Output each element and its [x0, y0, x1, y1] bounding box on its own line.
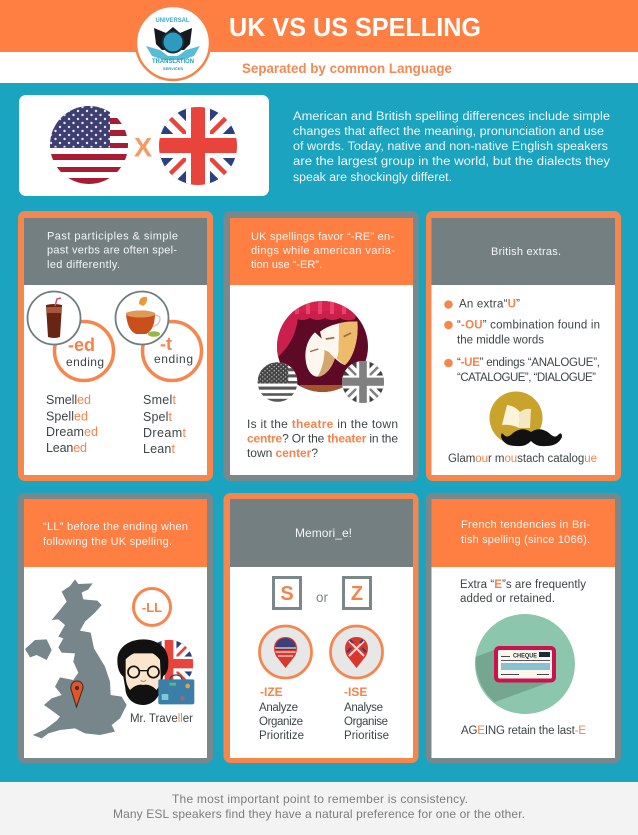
panel: Memorise	[224, 493, 418, 763]
S or Z boxes: S	[280, 583, 294, 605]
intro text: changes that affect the meaning, pronunciation and use	[293, 126, 604, 138]
-t ending ring	[142, 322, 202, 380]
caption: Glamour moustach catalogue	[448, 453, 597, 465]
panel heading: British extras.	[491, 246, 561, 258]
panel heading	[24, 499, 207, 567]
icon: cola glass	[28, 292, 80, 344]
icon: Mr Traveller	[117, 639, 194, 705]
footer: The most important point to remember is consistency.	[172, 792, 468, 806]
word list: -ed: Spelled	[46, 410, 88, 424]
intro text: speak are shockingly differet.	[293, 172, 452, 184]
panel: intro flags	[19, 95, 269, 196]
icon: UK map	[25, 579, 127, 738]
bullet list	[444, 298, 600, 384]
icon: US flag	[50, 106, 128, 184]
word list: -IZE: -IZE	[260, 685, 283, 699]
panel heading	[230, 218, 413, 285]
logo: Universal Translation Services	[136, 6, 210, 80]
body text: centre? Or the theater in the	[247, 432, 398, 446]
icon: UK flag	[159, 107, 237, 185]
icon: US flag grey	[258, 362, 297, 402]
icon: cheque: CHEQUE	[513, 652, 538, 660]
word list: -ISE: Analyse	[344, 702, 383, 714]
word list: -IZE: Analyze	[259, 702, 298, 714]
panel heading	[24, 218, 207, 285]
panel heading: tion use “-ER”.	[251, 259, 322, 271]
bullet list: An extra“U”	[459, 298, 520, 310]
footer: Many ESL speakers find they have a natural preference for one or the other.	[113, 807, 525, 821]
icon: tea cup	[116, 292, 168, 344]
body text	[460, 579, 586, 605]
panel heading: Past participles & simple	[47, 230, 178, 242]
icon: cheque	[475, 614, 575, 714]
panel heading: led differently.	[47, 259, 120, 271]
panel heading	[432, 218, 615, 285]
panel heading: following the UK spelling.	[43, 536, 172, 548]
logo: Universal Translation Services: TRANSLATION	[152, 59, 194, 65]
bullet list: “-UE” endings “ANALOGUE”,	[457, 357, 600, 369]
word list: -ed	[46, 393, 98, 455]
panel: British extras	[426, 211, 621, 481]
panel: past participles	[18, 211, 213, 481]
-LL ring: -LL	[142, 600, 162, 615]
body text	[247, 417, 398, 460]
bullet list: the middle words	[457, 334, 544, 346]
word list: -ISE: Organise	[344, 716, 388, 728]
panel: -RE endings	[224, 211, 418, 481]
body text: Extra “E”s are frequently	[460, 579, 586, 591]
body text: town center?	[247, 446, 318, 460]
S or Z boxes	[274, 578, 370, 608]
intro text: American and British spelling differences include simple	[293, 111, 610, 123]
panel heading: UK spellings favor “-RE” en-	[251, 231, 394, 243]
intro text: of words. Today, native and non-native English speakers	[293, 141, 608, 153]
word list: -ed: Smelled	[46, 393, 91, 407]
icon: book and moustache	[490, 392, 562, 446]
-t ending ring: ending	[154, 352, 193, 366]
word list: -ed: Dreamed	[46, 425, 98, 439]
word list: -ISE	[344, 685, 389, 742]
panel: French tendencies	[426, 493, 621, 763]
panel heading: French tendencies in Bri-	[461, 519, 590, 531]
intro text	[293, 111, 610, 184]
S or Z boxes: or	[316, 590, 329, 605]
word list: -t: Spelt	[143, 410, 173, 424]
logo: Universal Translation Services: SERVICES	[163, 66, 183, 71]
logo: Universal Translation Services: UNIVERSAL	[156, 18, 190, 24]
word list: -IZE: Organize	[259, 716, 303, 728]
bullet list: “-OU” combination found in	[457, 320, 600, 332]
body text: Is it the theatre in the town	[247, 417, 398, 431]
S or Z boxes: Z	[351, 583, 363, 605]
caption: AGEING retain the last-E	[461, 725, 586, 737]
bullet list: “CATALOGUE”, “DIALOGUE”	[457, 372, 596, 384]
body text: added or retained.	[460, 593, 555, 605]
panel heading: “LL” before the ending when	[43, 521, 188, 533]
icon: theatre masks	[270, 300, 368, 392]
word list: -t: Dreamt	[143, 426, 187, 440]
caption: Mr. Traveller	[130, 713, 193, 725]
intro text: are the largest group in the world, but the dialects they	[293, 156, 610, 168]
-ed ending ring	[54, 322, 114, 380]
-ed ending ring: ending	[66, 355, 104, 369]
panel heading: past verbs are often spel-	[47, 244, 177, 256]
word list: -ISE: -ISE	[344, 685, 367, 699]
word list: -t: Smelt	[143, 393, 177, 407]
word list: -IZE	[259, 685, 304, 742]
-LL ring	[134, 588, 170, 626]
icon: X between flags: X	[134, 132, 152, 162]
word list: -ed: Leaned	[46, 441, 87, 455]
-ed ending ring: -ed	[68, 335, 95, 355]
word list: -t: Leant	[143, 442, 176, 456]
subtitle: Separated by common Language	[242, 60, 452, 76]
header band	[0, 0, 638, 83]
word list: -ISE: Prioritise	[344, 730, 389, 742]
panel: LL	[18, 493, 213, 763]
panel heading: tish spelling (since 1066).	[461, 534, 590, 546]
footer	[0, 782, 638, 835]
icon: UK pin	[330, 626, 382, 678]
word list: -t	[143, 393, 187, 456]
word list: -IZE: Prioritize	[259, 730, 304, 742]
icon: UK flag grey	[342, 361, 384, 403]
-t ending ring: -t	[160, 334, 172, 354]
panel heading	[432, 499, 615, 567]
panel heading: Memori_e!	[295, 526, 352, 540]
panel heading: dings while american varia-	[251, 245, 395, 257]
panel heading	[230, 499, 413, 567]
icon: US pin	[260, 626, 312, 678]
title: UK VS US SPELLING	[229, 14, 481, 42]
icon: map pin	[71, 681, 83, 707]
